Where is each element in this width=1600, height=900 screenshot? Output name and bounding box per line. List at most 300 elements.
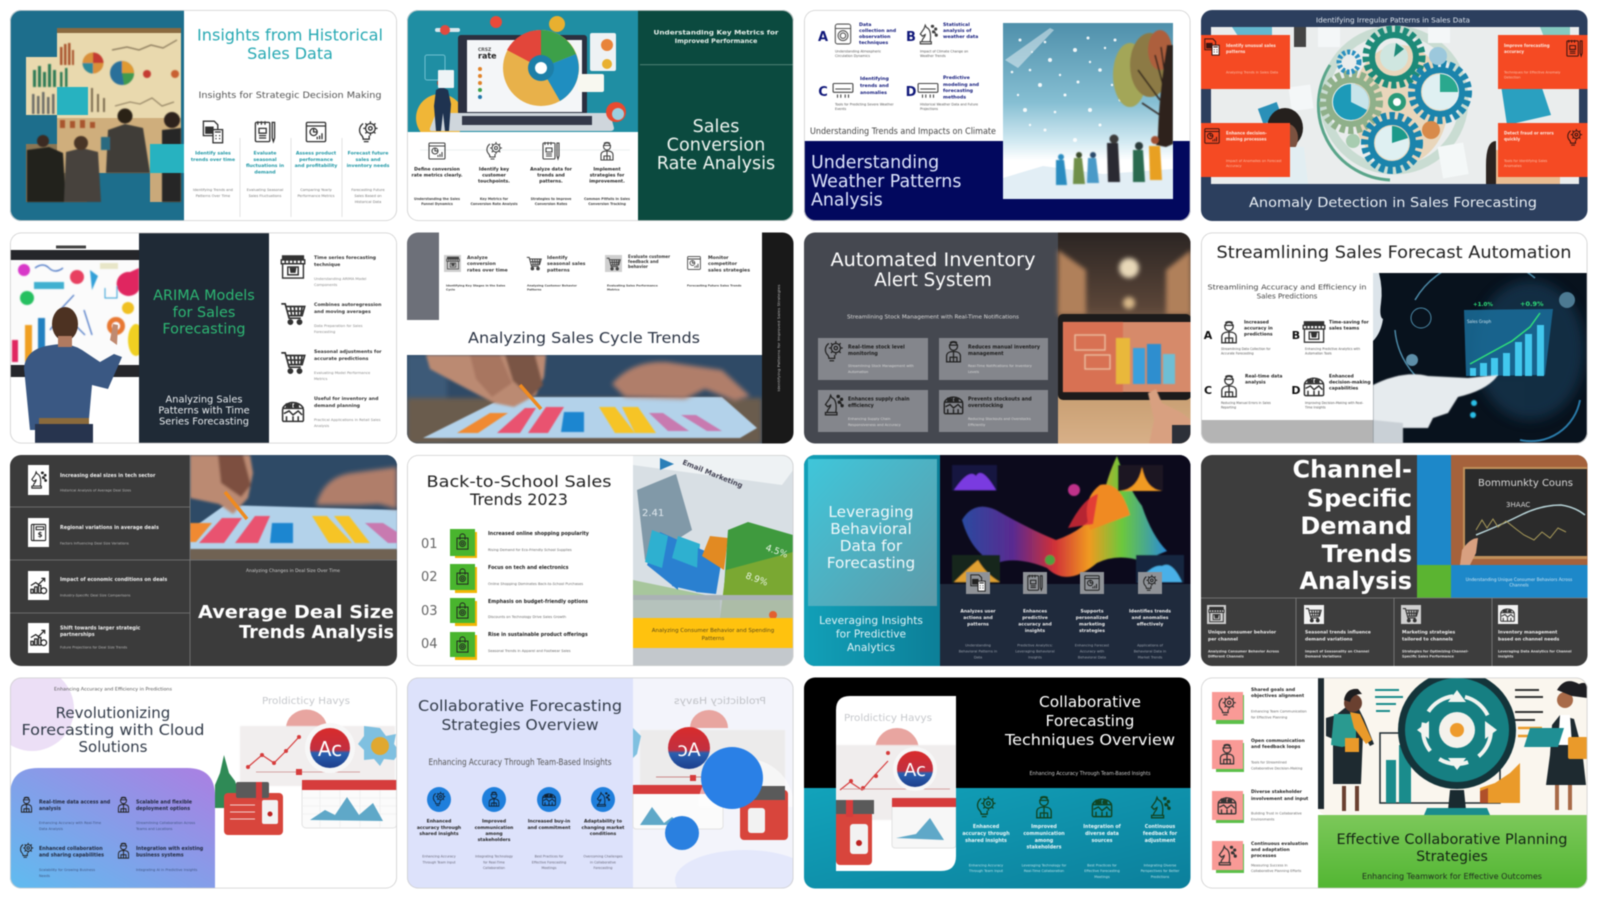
item: Assess product performance: Assess product xyxy=(296,150,337,156)
item 03: 03 xyxy=(421,604,438,619)
item: Identify seasonal: patterns xyxy=(547,268,570,274)
title: Revolutionizing xyxy=(56,704,170,722)
item: Define conversion xyxy=(412,143,463,206)
item: Real-time data access: Real-time data access and xyxy=(39,800,111,806)
item: Supports personalized: strategies xyxy=(1079,628,1105,634)
item: Combines autoregression: and moving averages xyxy=(314,309,371,315)
item B: Automation Tools xyxy=(1305,352,1332,356)
panel: Channel-Specific Demand Trends Analysis xyxy=(1201,455,1588,666)
item: Reduces manual: Real-Time Notifications for Inventory xyxy=(968,364,1032,368)
item: Adaptability: in Collaborative xyxy=(590,860,616,864)
item: Useful for inventory: Useful for inventory and xyxy=(314,396,378,402)
item: Scalable deployment xyxy=(118,797,195,831)
item C xyxy=(1204,374,1282,410)
item: Impact of economic conditions: Industry-Specific Deal Size Comparisons xyxy=(60,594,131,598)
item: Analyzes user actions: Understanding xyxy=(965,644,991,648)
item: Analyze data: Conversion Rates xyxy=(535,202,567,206)
item B: Time-saving for xyxy=(1329,320,1369,326)
item: Shift towards larger: Future Projections for Deal Size Trends xyxy=(60,646,127,650)
item: Implement strategies: improvement. xyxy=(589,178,625,184)
panel: Streamlining Sales Forecast Automation xyxy=(1201,232,1588,444)
item: Enhances supply chain xyxy=(818,390,928,432)
item: Integration with existing: business systems xyxy=(136,852,184,858)
item D: modeling and xyxy=(943,82,979,88)
item: Improve forecasting accuracy xyxy=(1498,35,1588,89)
title xyxy=(22,704,204,756)
subtitle: Enhancing Accuracy Through Team-Based Insights xyxy=(428,758,612,768)
item: Real-time data access xyxy=(21,797,111,831)
panel: green sidebar xyxy=(638,10,794,221)
item: Enhances supply chain: Enhancing Supply Chain xyxy=(848,417,890,421)
item: Seasonal trends xyxy=(1304,605,1371,658)
item: Detect fraud or errors: Anomalies xyxy=(1504,164,1522,168)
item: Inventory management xyxy=(1498,605,1572,658)
item: Analyze conversion: Analyze xyxy=(467,255,488,261)
item: Regional variations: Factors Influencing Deal Size Variations xyxy=(60,542,129,546)
item: Improved communication: Integrating Technology xyxy=(475,854,513,858)
image: man at whiteboard xyxy=(10,246,144,444)
item: Enhanced accuracy xyxy=(962,796,1010,873)
item: Identifies trends: and anomalies xyxy=(1132,615,1169,621)
item: Reduces manual: Levels xyxy=(968,370,979,374)
title xyxy=(811,153,961,210)
title: Analysis xyxy=(811,190,883,210)
item C: C xyxy=(818,85,828,100)
item: Analyze data: trends and xyxy=(537,172,565,178)
item: Increased buy-in: and commitment xyxy=(528,825,571,831)
item: Open communication xyxy=(1212,738,1305,772)
item C: analysis xyxy=(1245,380,1266,386)
item: Enhances supply chain: Responsiveness and Accuracy xyxy=(848,423,901,427)
item: Enhance decision-making: Impact of Anomalies on Forecast xyxy=(1226,159,1282,163)
item: Evaluate seasonal fluctuations: seasonal xyxy=(253,157,277,163)
item: Shared goals: for Effective Planning xyxy=(1251,716,1287,720)
image: robot hand with chart: +1.0% xyxy=(1473,302,1493,308)
item: Supports personalized: Accuracy with xyxy=(1080,650,1104,654)
item: Adaptability: changing market xyxy=(582,825,625,831)
item D: Improving Decision-Making with Real- xyxy=(1305,401,1363,405)
item: Evaluate customer: feedback and xyxy=(628,259,659,264)
title: Trends xyxy=(1322,540,1412,568)
item D: D xyxy=(906,85,917,100)
title: Collaborative Forecasting xyxy=(418,697,622,715)
image: team around target monitor xyxy=(1318,671,1588,815)
item: Improved communication: stakeholders xyxy=(478,837,511,843)
woman left xyxy=(1326,689,1374,811)
item: Integration of diverse data: Integration of xyxy=(1083,824,1122,830)
subtitle xyxy=(654,28,779,45)
item: Unique consumer behavior: Different Channels xyxy=(1208,654,1244,658)
item: Enhances predictive: Leveraging Behavioral xyxy=(1015,650,1055,654)
item A: Understanding Atmospheric xyxy=(835,50,881,54)
item: Inventory management: Insights xyxy=(1498,654,1513,658)
item: Time series: technique xyxy=(314,262,340,268)
image: Proldicticy Havys illustration: Proldicticy Havys xyxy=(844,713,932,724)
item: Identify key customer touchpoints: Identify key xyxy=(479,166,509,172)
item: Evaluate seasonal fluctuations: fluctuations in xyxy=(246,163,284,169)
item: Monitor competitor: sales strategies xyxy=(708,268,750,274)
image: laptop with donut chart: rate xyxy=(478,52,497,60)
item: Enhanced collaboration: Enhanced collaboration xyxy=(39,846,103,852)
accent: blue block xyxy=(1417,455,1451,565)
title xyxy=(426,472,612,509)
accent block xyxy=(407,232,439,320)
banner xyxy=(633,618,794,648)
item: Analyze data: Analyze data for xyxy=(530,166,573,172)
item: Enhance decision-making: making processes xyxy=(1226,136,1267,142)
connector line xyxy=(420,150,630,151)
item: Increasing deal sizes: Historical Analysis of Average Deal Sizes xyxy=(60,488,131,492)
title: Collaborative xyxy=(1039,693,1141,711)
item: Continuous feedback: adjustment xyxy=(1145,838,1176,844)
item: Implement strategies: Implement xyxy=(593,166,621,172)
item: Analyzes user actions: Data xyxy=(974,656,982,660)
item: Identify sales trends: trends over time xyxy=(191,157,235,163)
item: Define conversion: rate metrics clearly. xyxy=(412,172,463,178)
item B: B xyxy=(1292,329,1300,342)
title: Weather Patterns xyxy=(811,172,961,192)
item: Prevents stockouts xyxy=(939,390,1048,432)
image: gears xyxy=(1211,27,1579,184)
item B xyxy=(906,22,978,58)
item B: sales teams xyxy=(1329,326,1359,332)
item A: predictions xyxy=(1244,332,1273,338)
subtitle: Identifying Irregular Patterns in Sales Data xyxy=(1316,16,1470,24)
title: Rate Analysis xyxy=(657,154,775,174)
panel: Collaborative Forecasting Strategies Overview xyxy=(407,677,815,900)
item: Integration of diverse data: Meetings xyxy=(1094,875,1110,879)
item: Identify seasonal: seasonal sales xyxy=(547,261,586,267)
title: Data for xyxy=(840,537,903,555)
item: Inventory management: Inventory management xyxy=(1498,630,1558,636)
item: Supports personalized: Enhancing Forecast xyxy=(1075,644,1110,648)
decoration: lilac circle xyxy=(0,667,74,751)
subtitle xyxy=(158,394,250,428)
item: Seasonal trends: Seasonal trends influence xyxy=(1305,630,1371,636)
item: Regional variations: Regional variations in average deals xyxy=(60,525,159,531)
image: mirrored illustration with blue spheres xyxy=(633,677,815,900)
item: Improved communication: communication xyxy=(1023,831,1065,837)
item: Identifies trends xyxy=(1129,572,1171,660)
item: Evaluate customer: Evaluating Sales Performance xyxy=(607,284,658,288)
item C: anomalies xyxy=(860,90,887,96)
title: Specific xyxy=(1307,484,1412,512)
item: Implement strategies: strategies for xyxy=(590,172,625,178)
item D: forecasting xyxy=(943,88,973,94)
item: Increased buy-in: Increased buy-in xyxy=(528,818,570,824)
subtitle: Enhancing Accuracy Through Team-Based Insights xyxy=(1030,771,1151,777)
item: Forecast future sales: inventory needs xyxy=(347,163,390,169)
item: Real-time stock xyxy=(818,338,928,380)
image: robot hand with chart: +0.9% xyxy=(1520,300,1544,308)
title: for Sales xyxy=(173,305,235,321)
item: Enhanced accuracy: Enhanced xyxy=(427,818,451,824)
item A: Data xyxy=(859,22,871,28)
title: Automated Inventory xyxy=(830,250,1036,271)
item: Marketing strategies: Strategies for Optimizing Channel- xyxy=(1402,650,1469,654)
item: Detect fraud or errors xyxy=(1498,123,1588,177)
image: laptop with donut chart: CRSZ xyxy=(478,47,492,53)
item: Time series: Components xyxy=(314,283,337,287)
title: Demand xyxy=(1300,512,1412,540)
item: Seasonal trends: Demand Variations xyxy=(1305,654,1341,658)
item: Integration with existing xyxy=(118,843,204,872)
subtitle xyxy=(1208,282,1366,300)
item: Time series: Time series forecasting xyxy=(314,255,376,261)
item: Identify key customer touchpoints: customer xyxy=(482,172,507,178)
item: Regional variations: $ xyxy=(38,531,43,539)
item: Integration of diverse data: Best Practices for xyxy=(1087,864,1117,868)
item C: trends and xyxy=(860,83,889,89)
item: Real-time stock: Streamlining Stock Management with xyxy=(848,364,914,368)
item: Unique consumer behavior xyxy=(1207,605,1279,658)
item: Improve forecasting accuracy: Techniques for Effective Anomaly xyxy=(1503,70,1560,74)
item A: Circulation Dynamics xyxy=(835,54,870,58)
image: marketing dashboard: 8.9% xyxy=(744,571,769,589)
panel: gradient features xyxy=(10,768,215,889)
item: Diverse stakeholder: Building Trust in Collaborative xyxy=(1251,812,1302,816)
item: Evaluate seasonal fluctuations: Sales Fluctuations xyxy=(249,194,281,198)
item: Shift towards larger: partnerships xyxy=(60,632,95,638)
item: Forecast future sales: Historical Data xyxy=(355,200,381,204)
item 01: 01 xyxy=(421,537,438,552)
photo: silhouettes xyxy=(27,108,181,202)
item D: Projections xyxy=(920,107,938,111)
item: Identifies trends: Market Trends xyxy=(1138,656,1162,660)
accent: green block xyxy=(1417,565,1451,598)
item D: capabilities xyxy=(1329,386,1359,392)
image: marketing dashboard: 4.5% xyxy=(764,543,789,561)
title: Streamlining Sales Forecast Automation xyxy=(1216,243,1572,262)
panel: Effective Collaborative Planning Strategies xyxy=(1201,671,1588,889)
item A: A xyxy=(1204,329,1213,342)
title: Trends Analysis xyxy=(239,623,394,643)
item: Marketing strategies xyxy=(1401,605,1469,658)
title: Anomaly Detection in Sales Forecasting xyxy=(1249,195,1537,211)
item 03: Discounts on Technology Drive Sales Growth xyxy=(488,615,566,619)
item A: accuracy in xyxy=(1244,326,1273,332)
item: Continuous feedback: Continuous xyxy=(1145,824,1175,830)
item 02 xyxy=(421,564,583,593)
item C: Reporting xyxy=(1221,406,1236,410)
item: Integration with existing: Integration with existing xyxy=(136,846,204,852)
item D: Historical Weather Data and Future xyxy=(920,102,978,106)
item: Enhanced collaboration: Scalability for Growing Business xyxy=(39,868,95,872)
item: Increasing deal sizes xyxy=(28,465,156,495)
item: Integration of diverse data xyxy=(1083,799,1122,879)
item 04: 04 xyxy=(421,637,438,652)
item: Continuous feedback: Integrating Diverse xyxy=(1144,864,1176,868)
item: Diverse stakeholder xyxy=(1212,789,1309,823)
item: Enhanced collaboration: and sharing capabilities xyxy=(39,852,104,858)
item: Enhanced accuracy: accuracy through xyxy=(417,825,461,831)
image: snow scene xyxy=(1003,23,1173,199)
item: Integration of diverse data: sources xyxy=(1092,838,1113,844)
separators xyxy=(1201,598,1588,666)
item: Diverse stakeholder: Environments xyxy=(1251,818,1275,822)
item: Time series: Understanding ARIMA Model xyxy=(314,277,366,281)
item: Improved communication xyxy=(475,787,513,870)
panel: Anomaly Detection in Sales Forecasting xyxy=(1201,10,1588,221)
subtitle: Enhancing Teamwork for Effective Outcomes xyxy=(1362,871,1542,881)
item 04 xyxy=(421,632,588,660)
title: Forecasting xyxy=(162,322,246,338)
item: Continuous evaluation: Measuring Success in xyxy=(1251,864,1288,868)
accent gradient card xyxy=(808,459,937,606)
item: Enhances predictive: insights xyxy=(1025,628,1045,634)
subtitle: Insights for Strategic Decision Making xyxy=(198,90,382,101)
item: Analyzes user actions xyxy=(959,572,997,660)
item: Identifies trends: Applications of xyxy=(1137,644,1164,648)
item 03 xyxy=(421,598,588,626)
item: Assess product performance: and profitability xyxy=(295,163,337,169)
item: Monitor competitor: Monitor xyxy=(708,255,729,261)
item C: Reducing Manual Errors in Sales xyxy=(1221,401,1271,405)
item: Reduces manual: management xyxy=(968,351,1004,357)
item: Define conversion: Funnel Dynamics xyxy=(421,202,453,206)
item: Reduces manual: Reduces manual inventory xyxy=(968,344,1041,350)
accent: teal square left xyxy=(57,87,88,115)
item: Identify sales trends: Identifying Trends and xyxy=(193,188,233,192)
title: Insights from Historical xyxy=(197,26,383,44)
item 03: Emphasis on budget-friendly options xyxy=(488,599,588,605)
title xyxy=(657,117,775,174)
item: Seasonal adjustments: Evaluating Model Performance xyxy=(314,371,371,375)
banner: Analyzing Consumer Behavior and Spending xyxy=(652,628,774,634)
item: Real-time stock: monitoring xyxy=(848,351,878,357)
item: Identifies trends: Identifies trends xyxy=(1129,608,1171,614)
item B: Weather Trends xyxy=(920,54,946,58)
item: Define conversion: Understanding the Sales xyxy=(414,197,460,201)
item: Assess product performance xyxy=(295,122,337,198)
photo: chalkboard: Bommunkty Couns xyxy=(1478,478,1573,489)
image: rainbow data landscape xyxy=(940,455,1191,584)
item: Seasonal adjustments: Metrics xyxy=(314,377,327,381)
panel: teal column xyxy=(804,455,940,666)
item: Useful for inventory: Practical Applications in Retail Sales xyxy=(314,418,381,422)
item: Marketing strategies: Marketing strategies xyxy=(1402,630,1455,636)
item: Regional variations xyxy=(28,518,159,547)
item: Marketing strategies: tailored to channels xyxy=(1402,636,1453,642)
item: Shared goals: Enhancing Team Communication xyxy=(1251,710,1307,714)
title band xyxy=(804,141,1191,221)
subtitle: Patterns with Time xyxy=(158,406,250,416)
item A xyxy=(1204,320,1273,356)
item: Improved communication: communication xyxy=(475,825,513,831)
item: Forecast future sales: sales and xyxy=(355,157,381,163)
item: Supports personalized: marketing xyxy=(1079,622,1105,628)
title: Strategies xyxy=(1416,849,1488,865)
item: Analyze data: Strategies to Improve xyxy=(531,197,572,201)
title: Forecasting with Cloud xyxy=(22,721,204,739)
panel: ARIMA Models for Sales Forecasting xyxy=(10,232,397,444)
divider xyxy=(640,64,793,66)
item: Identify sales trends xyxy=(191,121,235,198)
item: Unique consumer behavior: Analyzing Consumer Behavior Across xyxy=(1208,650,1279,654)
item: Identify unusual sales patterns: patterns xyxy=(1226,49,1246,54)
item D: Predictive xyxy=(943,75,970,81)
item: Implement strategies xyxy=(584,142,630,206)
item: Supports personalized xyxy=(1075,572,1110,660)
item: Identify sales trends: Patterns Over Time xyxy=(196,194,231,198)
item: Adaptability: Adaptability to xyxy=(584,818,622,824)
vertical caption: Identifying Patterns for Improved Sales Strategies xyxy=(776,284,781,392)
item: Forecast future sales: Forecast future xyxy=(348,150,388,156)
item A: observation xyxy=(859,34,890,40)
item: Identify key customer touchpoints: Key Metrics for xyxy=(480,197,509,201)
item: Enhance decision-making: Accuracy xyxy=(1226,164,1241,168)
photo: hand with pen over chart xyxy=(190,455,397,560)
item: Improve forecasting accuracy: accuracy xyxy=(1504,49,1524,54)
title: Behavioral xyxy=(830,520,912,538)
item: Increased buy-in: Effective Forecasting xyxy=(532,860,566,864)
item: Continuous evaluation: Continuous evaluation xyxy=(1251,841,1308,847)
item: Inventory management: based on channel needs xyxy=(1498,636,1560,642)
item: Enhances predictive xyxy=(1015,572,1055,660)
item: Impact of economic conditions xyxy=(28,571,167,600)
item: Analyze data: patterns. xyxy=(539,178,563,184)
item: Open communication: Tools for Streamlined xyxy=(1250,760,1287,764)
image: Proldicticy Havys illustration: Ac xyxy=(904,760,926,781)
item 04: Rise in sustainable product offerings xyxy=(488,632,588,638)
image: Proldicticy Havys illustration xyxy=(215,696,400,835)
item B: B xyxy=(906,30,916,45)
title xyxy=(153,288,255,338)
item D xyxy=(1291,374,1371,410)
item: Enhance decision-making: Enhance decision- xyxy=(1226,130,1267,136)
image: robot hand with chart: Sales Graph xyxy=(1467,319,1492,324)
item 02: Focus on tech and electronics xyxy=(488,565,569,571)
subtitle: Sales Predictions xyxy=(1257,292,1318,300)
item: Improved communication: Real-Time Collaboration xyxy=(1024,869,1064,873)
subtitle: Leveraging Insights xyxy=(819,615,923,627)
item: Improved communication: Leveraging Technology for xyxy=(1022,864,1067,868)
item: Real-time data access: Data Analysis xyxy=(39,827,63,831)
item: Unique consumer behavior: Unique consumer behavior xyxy=(1208,630,1277,636)
item A xyxy=(818,22,896,58)
item: Analyzes user actions: Analyzes user xyxy=(960,608,996,614)
image: marketing dashboard: Email Marketing xyxy=(681,458,744,490)
item: Detect fraud or errors: Detect fraud or errors xyxy=(1504,130,1554,136)
item: Improved communication: stakeholders xyxy=(1027,844,1062,850)
item: Open communication: Collaborative Decision-Making xyxy=(1251,766,1302,770)
item: Identify key customer touchpoints xyxy=(470,142,518,206)
item 01: Increased online shopping popularity xyxy=(488,531,590,537)
item: Implement strategies: Common Pitfalls in Sales xyxy=(584,197,630,201)
item: Enhanced accuracy: Through Team Input xyxy=(968,869,1004,873)
item B: Impact of Climate Change on xyxy=(920,50,968,54)
item 02: Online Shopping Dominates Back-to-School Purchases xyxy=(488,582,583,586)
item: Shared goals xyxy=(1212,687,1307,724)
item A: techniques xyxy=(859,40,888,46)
item: Integration with existing: Integrating AI in Predictive Insights xyxy=(136,868,198,872)
item: Improved communication: Improved xyxy=(482,818,506,824)
item: Enhances supply chain: efficiency xyxy=(848,403,875,409)
item: Continuous feedback xyxy=(1141,797,1180,879)
item D xyxy=(906,75,979,111)
item: Identify seasonal: Analyzing Customer Behavior xyxy=(527,284,577,288)
item: Time series xyxy=(281,255,376,287)
item: Evaluate seasonal fluctuations xyxy=(246,121,284,198)
item: Combines autoregression: Forecasting xyxy=(314,330,335,334)
item: Increasing deal sizes: Increasing deal sizes in tech sector xyxy=(60,473,156,479)
subtitle: Streamlining Stock Management with Real-Time Notifications xyxy=(847,314,1019,320)
title: Leveraging xyxy=(828,503,914,521)
panel: Automated Inventory Alert System xyxy=(804,232,1191,444)
item: Enhances predictive: accuracy and xyxy=(1018,622,1052,628)
column dividers xyxy=(240,138,342,217)
item 02: 02 xyxy=(421,570,438,585)
